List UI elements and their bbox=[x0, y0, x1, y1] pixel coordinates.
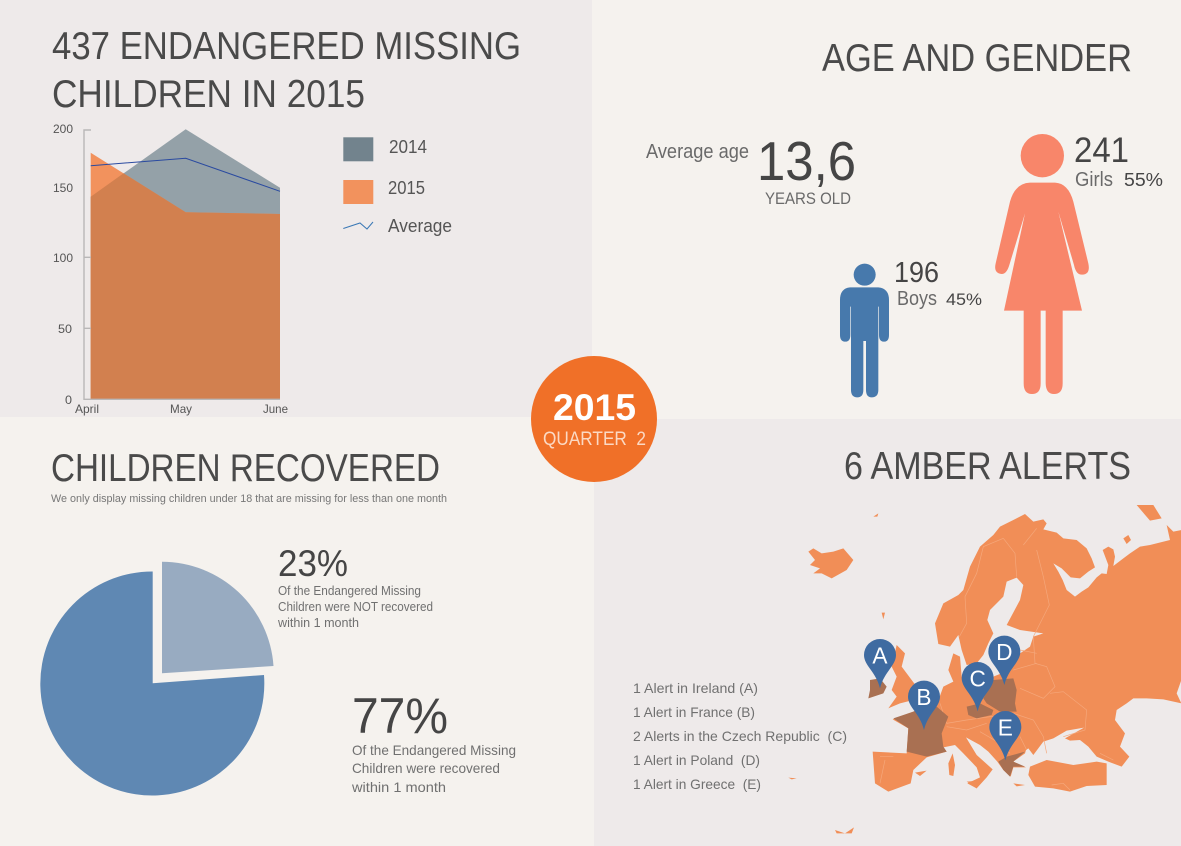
pin: E Greece bbox=[989, 711, 1021, 760]
stat: 77 percent recovered: Children were recovered bbox=[352, 760, 500, 776]
area chart: monthly missing children: 50 bbox=[58, 322, 72, 336]
icon: boy figure bbox=[840, 264, 889, 397]
stat: boys: 45% bbox=[946, 290, 982, 309]
badge: 2015 quarter 2: QUARTER 2 bbox=[543, 428, 646, 450]
stat: 23 percent not recovered: 23% bbox=[278, 543, 348, 584]
list: alerts by country: 1 Alert in Poland (D) bbox=[633, 752, 760, 768]
area chart: monthly missing children: 100 bbox=[53, 251, 73, 265]
stat: boys: Boys bbox=[897, 288, 937, 310]
stat: 77 percent recovered: Of the Endangered Missing bbox=[352, 742, 516, 758]
map: Europe with alert countries bbox=[788, 505, 1181, 833]
area chart: monthly missing children: 200 bbox=[53, 122, 73, 136]
chart legend: 2015 bbox=[388, 178, 425, 198]
title: children recovered: CHILDREN RECOVERED bbox=[51, 447, 440, 490]
pin: A Ireland bbox=[864, 639, 896, 688]
chart legend: 2014 bbox=[389, 137, 427, 157]
chart legend: Average bbox=[388, 216, 452, 236]
panel: amber alerts background bbox=[594, 419, 1181, 846]
title: endangered missing children: 437 ENDANGERED MISSING bbox=[52, 25, 521, 68]
stat: 77 percent recovered: within 1 month bbox=[351, 779, 446, 795]
title: endangered missing children: CHILDREN IN 2015 bbox=[52, 73, 365, 116]
badge: 2015 quarter 2 bbox=[531, 356, 657, 482]
stat: 23 percent not recovered: Of the Endangered Missing bbox=[278, 584, 421, 598]
pin: B France: B bbox=[916, 684, 932, 710]
stat: girls: Girls bbox=[1075, 169, 1113, 191]
badge: 2015 quarter 2: 2015 bbox=[553, 387, 636, 428]
pin: C Czech Republic: C bbox=[969, 665, 986, 691]
stat: boys bbox=[894, 257, 982, 310]
icon: girl figure bbox=[995, 134, 1089, 394]
chart legend bbox=[343, 137, 452, 236]
panel: missing children background bbox=[0, 0, 592, 417]
list: alerts by country bbox=[633, 680, 847, 792]
stat: 23 percent not recovered bbox=[277, 543, 433, 630]
area chart: monthly missing children: May bbox=[170, 402, 192, 416]
note: display criteria: We only display missing children under 18 that are missing for less than one month bbox=[51, 493, 447, 505]
list: alerts by country: 1 Alert in Greece (E) bbox=[633, 776, 761, 792]
stat: average age: 13,6 bbox=[757, 130, 856, 192]
stat: 23 percent not recovered: Children were NOT recovered bbox=[278, 600, 433, 614]
area chart: monthly missing children: June bbox=[263, 402, 288, 416]
area chart: monthly missing children: April bbox=[75, 402, 99, 416]
list: alerts by country: 1 Alert in Ireland (A) bbox=[633, 680, 758, 696]
area chart: monthly missing children bbox=[53, 122, 288, 416]
stat: boys: 196 bbox=[894, 257, 939, 289]
pin: C Czech Republic bbox=[962, 662, 994, 711]
stat: 23 percent not recovered: within 1 month bbox=[277, 616, 359, 630]
pin: D Poland bbox=[988, 636, 1020, 685]
stat: girls: 55% bbox=[1124, 170, 1163, 190]
stat: average age bbox=[646, 130, 856, 208]
list: alerts by country: 1 Alert in France (B) bbox=[633, 704, 755, 720]
title: age and gender: AGE AND GENDER bbox=[822, 37, 1132, 80]
stat: 77 percent recovered bbox=[351, 688, 516, 795]
title: endangered missing children bbox=[52, 25, 521, 116]
stat: average age: YEARS OLD bbox=[765, 189, 851, 208]
list: alerts by country: 2 Alerts in the Czech Republic (C) bbox=[633, 728, 847, 744]
pin: A Ireland: A bbox=[872, 642, 888, 668]
pin: D Poland: D bbox=[996, 639, 1013, 665]
stat: average age: Average age bbox=[646, 141, 749, 163]
stat: girls bbox=[1074, 131, 1163, 191]
pin: E Greece: E bbox=[998, 714, 1013, 740]
stat: girls: 241 bbox=[1074, 131, 1129, 170]
pie chart: recovered share bbox=[40, 562, 274, 795]
area chart: monthly missing children: 150 bbox=[53, 181, 73, 195]
title: amber alerts: 6 AMBER ALERTS bbox=[844, 445, 1131, 488]
stat: 77 percent recovered: 77% bbox=[352, 688, 448, 744]
pin: B France bbox=[908, 681, 940, 730]
area chart: monthly missing children: 0 bbox=[65, 393, 72, 407]
